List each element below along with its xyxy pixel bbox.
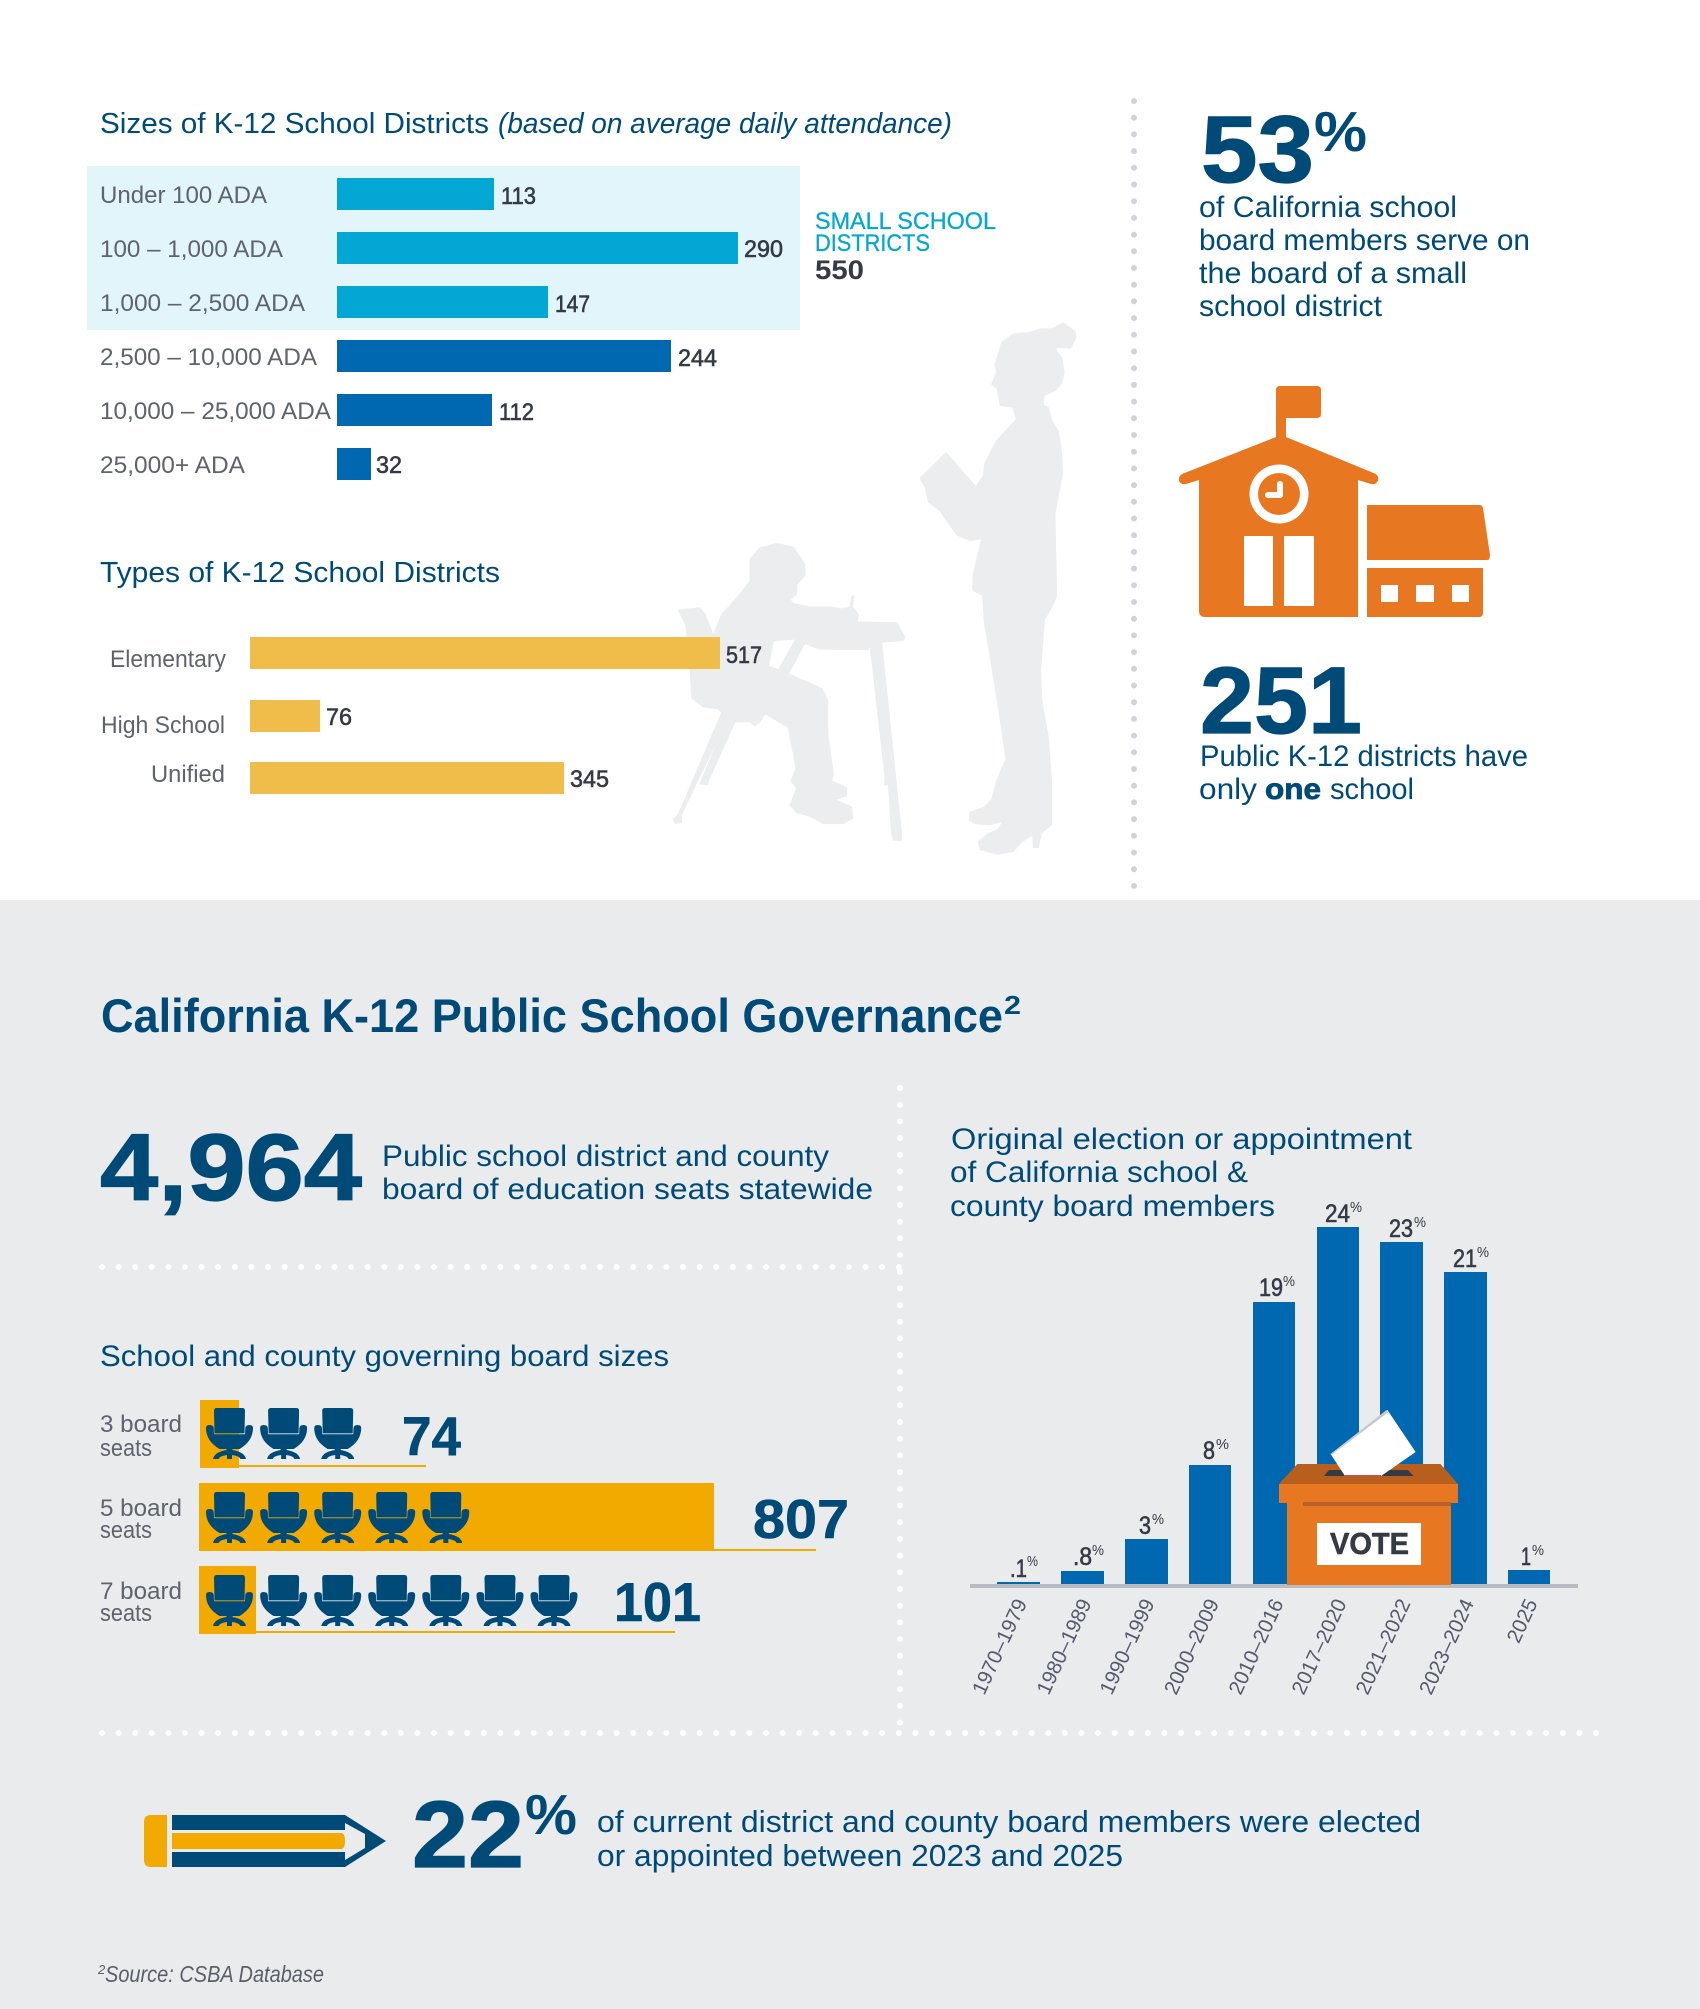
figure: 53% bbox=[1201, 97, 1367, 203]
bar row: 25,000+ ADA: 25,000+ ADA bbox=[100, 452, 245, 479]
heading: board sizes: School and county governing board sizes bbox=[100, 1340, 669, 1373]
bar row: unified: Unified bbox=[151, 761, 225, 788]
text: 251 description: one bbox=[1265, 773, 1321, 806]
icon: pencil bbox=[144, 1815, 386, 1867]
callout: small school districts 550 bbox=[815, 208, 996, 285]
axis labels bbox=[968, 1595, 1543, 1698]
value labels: % bbox=[1283, 1273, 1295, 1290]
footnote: source: 2 bbox=[97, 1962, 106, 1977]
axis labels: 1970–1979 bbox=[968, 1595, 1032, 1698]
axis labels: 1980–1989 bbox=[1032, 1595, 1097, 1698]
icon: schoolhouse bbox=[1179, 386, 1490, 617]
bar row: under 100 ADA: Under 100 ADA bbox=[100, 182, 267, 209]
panel: governing board sizes bbox=[100, 1340, 849, 1634]
row: 7 board seats: 101 bbox=[614, 1571, 701, 1633]
axis labels: 2023–2024 bbox=[1415, 1595, 1479, 1698]
text: 53 percent description: school district bbox=[1199, 290, 1383, 323]
text: 22 percent description: or appointed between 2023 and 2025 bbox=[597, 1838, 1123, 1873]
text: 53 percent description: the board of a small bbox=[1199, 257, 1467, 290]
bars bbox=[997, 1227, 1550, 1585]
heading: original election or appointment: Original election or appointment bbox=[951, 1123, 1413, 1156]
stat: 53 percent bbox=[1199, 97, 1530, 323]
icon: ballot box bbox=[1279, 1410, 1458, 1585]
value labels: % bbox=[1350, 1199, 1362, 1216]
axis labels: 2021–2022 bbox=[1351, 1595, 1416, 1698]
text: 53 percent description: board members serve on bbox=[1199, 224, 1530, 257]
axis labels: 2017–2020 bbox=[1287, 1595, 1352, 1698]
bar row: 1,000 to 2,500 ADA bbox=[100, 286, 590, 318]
heading: types of K-12 school districts: Types of K-12 School Districts bbox=[100, 557, 500, 589]
text: 4,964 description: Public school district and county bbox=[382, 1140, 829, 1173]
panel: sizes of school districts bbox=[87, 108, 996, 480]
text: 251 description: Public K-12 districts have bbox=[1200, 740, 1528, 773]
panel: original election or appointment chart bbox=[950, 1123, 1578, 1698]
row: 7 board seats: 7 board bbox=[100, 1578, 182, 1605]
bar row: high school bbox=[101, 700, 352, 739]
heading: original election or appointment: of California school & bbox=[950, 1156, 1248, 1189]
text: 4,964 description bbox=[382, 1140, 873, 1206]
bar row: elementary bbox=[110, 637, 762, 673]
value labels: 24 bbox=[1325, 1200, 1350, 1228]
bar row: elementary: Elementary bbox=[110, 646, 226, 673]
row: 5 board seats bbox=[100, 1483, 849, 1551]
value labels: 3 bbox=[1139, 1512, 1151, 1540]
bar row: under 100 ADA: 113 bbox=[501, 183, 536, 210]
heading: original election or appointment bbox=[950, 1123, 1413, 1223]
bar row: 2,500 to 10,000 ADA bbox=[100, 340, 717, 372]
row: 3 board seats: 74 bbox=[402, 1405, 461, 1467]
row: 7 board seats: seats bbox=[100, 1600, 152, 1627]
callout: small school districts 550: DISTRICTS bbox=[815, 230, 930, 257]
bar row: 100 to 1,000 ADA: 290 bbox=[744, 236, 783, 263]
value labels: % bbox=[1092, 1542, 1104, 1559]
highlight: small district rows bbox=[87, 166, 800, 330]
bar row: 100 to 1,000 ADA bbox=[100, 232, 783, 264]
figure: 251: 251 bbox=[1200, 648, 1362, 754]
axis labels: 2025 bbox=[1502, 1595, 1543, 1646]
bar row: under 100 ADA bbox=[100, 178, 536, 210]
bar row: 10,000 to 25,000 ADA bbox=[100, 394, 534, 426]
axis line bbox=[970, 1584, 1578, 1588]
bar chart: election years bbox=[968, 1199, 1578, 1698]
heading: sizes of K-12 school districts: Sizes of K-12 School Districts bbox=[100, 108, 489, 140]
value labels: .8 bbox=[1073, 1543, 1092, 1571]
figure: 22% bbox=[412, 1782, 577, 1888]
row: 3 board seats: seats bbox=[100, 1435, 152, 1462]
text: 22 percent description: of current district and county board members were elected bbox=[597, 1804, 1421, 1839]
callout: small school districts 550: 550 bbox=[815, 255, 864, 285]
background: white upper section bbox=[0, 0, 1700, 900]
silhouette: student writing at desk bbox=[673, 543, 905, 840]
value labels: 1 bbox=[1521, 1543, 1531, 1571]
text: 251 description bbox=[1199, 740, 1528, 806]
panel: types of school districts bbox=[100, 557, 762, 794]
text: 53 percent description: of California school bbox=[1199, 191, 1457, 224]
stat: 251 single-school districts bbox=[1199, 648, 1528, 806]
value labels: % bbox=[1216, 1436, 1229, 1453]
bar row: 1,000 to 2,500 ADA: 147 bbox=[555, 291, 590, 318]
text: 4,964 description: board of education seats statewide bbox=[382, 1173, 873, 1206]
axis labels: 2000–2009 bbox=[1160, 1595, 1224, 1698]
bar row: elementary: 517 bbox=[726, 642, 762, 669]
row: 3 board seats: 3 board bbox=[100, 1411, 182, 1438]
value labels: % bbox=[1152, 1511, 1164, 1528]
value labels: % bbox=[1532, 1542, 1544, 1559]
axis labels: 1990–1999 bbox=[1095, 1595, 1160, 1698]
stat: 22 percent bbox=[412, 1782, 1421, 1888]
row: 5 board seats: 807 bbox=[753, 1488, 849, 1550]
heading: original election or appointment: county board members bbox=[950, 1190, 1275, 1223]
bar row: 25,000+ ADA: 32 bbox=[376, 452, 402, 479]
bar row: 10,000 to 25,000 ADA: 10,000 – 25,000 ADA bbox=[100, 398, 331, 425]
text: 53 percent description bbox=[1199, 191, 1530, 323]
row: 5 board seats: 5 board bbox=[100, 1495, 182, 1522]
bar row: 10,000 to 25,000 ADA: 112 bbox=[499, 399, 534, 426]
bar row: unified bbox=[151, 761, 609, 794]
value labels: 21 bbox=[1453, 1245, 1477, 1273]
value labels: 19 bbox=[1259, 1274, 1283, 1302]
value labels: % bbox=[1414, 1214, 1426, 1231]
text: 251 description: only bbox=[1199, 773, 1257, 806]
axis labels: 2010–2016 bbox=[1224, 1595, 1289, 1698]
callout: small school districts 550: SMALL SCHOOL bbox=[815, 208, 996, 235]
value labels: 23 bbox=[1389, 1215, 1413, 1243]
figure: 53%: 53 bbox=[1201, 97, 1314, 203]
heading: California K-12 public school governance: California K-12 Public School Governance bbox=[101, 989, 1003, 1042]
value labels: % bbox=[1027, 1553, 1038, 1570]
bar row: unified: 345 bbox=[570, 766, 609, 793]
figure: 53%: % bbox=[1314, 100, 1367, 164]
bar row: high school: 76 bbox=[326, 704, 352, 731]
heading: sizes of K-12 school districts: (based on average daily attendance) bbox=[498, 108, 952, 140]
bar row: 1,000 to 2,500 ADA: 1,000 – 2,500 ADA bbox=[100, 290, 305, 317]
row: 3 board seats bbox=[100, 1400, 461, 1468]
figure: 22%: 22 bbox=[412, 1782, 524, 1888]
footnote: source: Source: CSBA Database bbox=[105, 1961, 324, 1987]
silhouette: teacher holding book bbox=[920, 323, 1076, 854]
background: gray governance section bbox=[0, 900, 1700, 2009]
figure: 22%: % bbox=[525, 1783, 577, 1847]
value labels bbox=[1010, 1199, 1544, 1583]
stat: 4,964 board seats bbox=[100, 1115, 873, 1221]
heading: sizes of K-12 school districts bbox=[100, 108, 952, 140]
text: 22 percent description bbox=[597, 1804, 1421, 1873]
text: 251 description: school bbox=[1330, 773, 1414, 806]
heading: California K-12 public school governance: 2 bbox=[1004, 990, 1021, 1020]
figure: 4,964: 4,964 bbox=[100, 1115, 362, 1221]
bar row: 100 to 1,000 ADA: 100 – 1,000 ADA bbox=[100, 236, 283, 263]
value labels: % bbox=[1477, 1244, 1489, 1261]
bar row: 2,500 to 10,000 ADA: 244 bbox=[678, 345, 717, 372]
bar row: 25,000+ ADA bbox=[100, 448, 402, 480]
value labels: .1 bbox=[1010, 1555, 1027, 1583]
bar row: high school: High School bbox=[101, 712, 225, 739]
bar row: 2,500 to 10,000 ADA: 2,500 – 10,000 ADA bbox=[100, 344, 317, 371]
row: 5 board seats: seats bbox=[100, 1517, 152, 1544]
row: 7 board seats bbox=[100, 1566, 701, 1634]
icon: ballot box: VOTE bbox=[1330, 1526, 1409, 1561]
value labels: 8 bbox=[1203, 1437, 1215, 1465]
